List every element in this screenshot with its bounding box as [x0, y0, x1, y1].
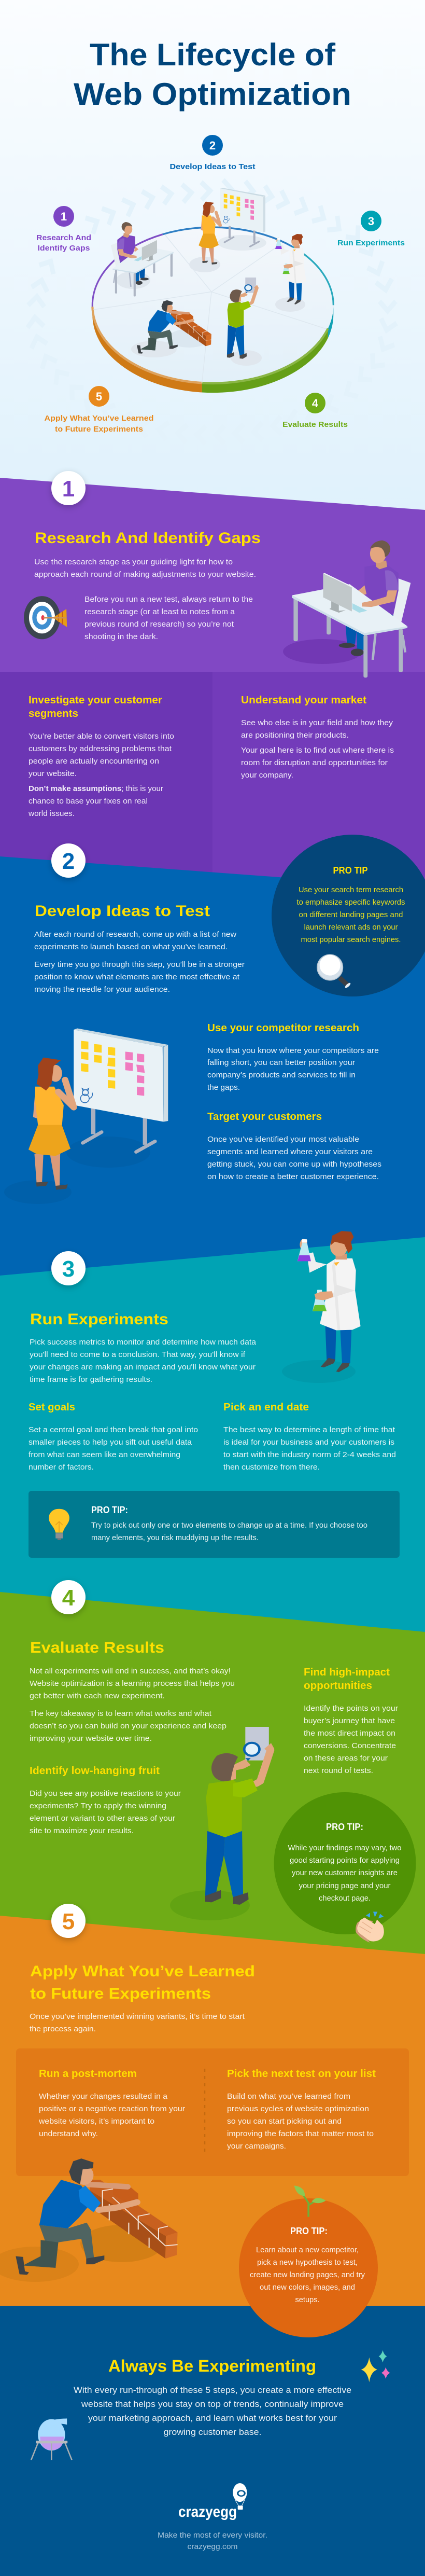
panel: set goals: smaller pieces to help you sift out useful data [29, 1438, 192, 1447]
text: closing paragraph: your marketing approach, and learn what works best for your [88, 2413, 337, 2423]
step marker 3: 3 [368, 215, 374, 228]
panel: investigate your customer segments: world issues. [28, 809, 75, 818]
panel: find high-impact opportunities: next round of tests. [304, 1766, 373, 1775]
text: evaluate intro: The key takeaway is to learn what works and what [30, 1709, 212, 1718]
text: run intro [30, 1338, 257, 1384]
panel: investigate your customer segments: Don’t make assumptions; this is your [29, 784, 163, 793]
panel: identify low-hanging fruit: Did you see any positive reactions to your [30, 1789, 181, 1798]
callout: pro tip circle orange: out new colors, images, and [260, 2283, 355, 2292]
text: apply intro [30, 2012, 245, 2033]
panel: investigate your customer segments: customers by addressing problems that [29, 744, 172, 753]
panel: understand your market: your company. [241, 771, 293, 780]
figure: analyst with magnifier [170, 1727, 274, 1920]
figure: scientist on disc [275, 234, 306, 312]
column: pick the next test: improving the factors that matter most to [227, 2129, 374, 2138]
text: apply intro: the process again. [30, 2025, 96, 2033]
badge: step 2 [51, 843, 86, 878]
panel: pick an end date: Pick an end date [223, 1402, 309, 1413]
figure: woman at sticky board on disc [189, 188, 266, 272]
panel: understand your market: Your goal here is to find out where there is [241, 746, 394, 755]
text: research note: previous round of research) so you’re not [84, 620, 234, 629]
panel: target your customers: Once you’ve identified your most valuable [207, 1135, 359, 1144]
step marker 2 [170, 135, 255, 171]
panel: find high-impact opportunities: opportunities [304, 1680, 372, 1692]
panel: understand your market: See who else is in your field and how they [241, 718, 393, 727]
step marker 5 [45, 386, 153, 434]
panel: find high-impact opportunities: on these areas for your [304, 1754, 388, 1763]
panel: find high-impact opportunities: Identify the points on your [304, 1704, 398, 1713]
heading: develop: Develop Ideas to Test [35, 903, 210, 920]
column: run a post-mortem: Whether your changes resulted in a [39, 2092, 168, 2101]
text: research note: research stage (or at least to notes from a [84, 607, 235, 616]
step marker 2: 2 [209, 139, 216, 152]
column: run a post-mortem: website visitors, it’s important to [38, 2117, 154, 2126]
panel: use your competitor research: company’s products and services to fill in [207, 1071, 356, 1079]
panel: use your competitor research: Now that you know where your competitors are [207, 1046, 379, 1055]
figure: researcher at desk on disc [111, 222, 174, 297]
panel: use your competitor research: falling short, you can better position your [207, 1058, 355, 1067]
icon: flask on stand [31, 2418, 72, 2460]
panel: evaluate section background [0, 1592, 425, 1961]
text: run intro: Pick success metrics to monitor and determine how much data [30, 1338, 257, 1347]
text: tagline [158, 2531, 267, 2551]
callout: pro tip circle green [274, 1792, 416, 1934]
column: pick the next test: Build on what you’ve learned from [227, 2092, 350, 2101]
step marker 3: Run Experiments [337, 239, 405, 247]
text: develop intro: moving the needle for your audience. [34, 985, 170, 994]
badge: step 5 [51, 1904, 86, 1938]
text: evaluate intro: Not all experiments will end in success, and that’s okay! [30, 1667, 231, 1675]
step marker 4: 4 [312, 397, 319, 410]
text: evaluate intro: Website optimization is a learning process that helps you [30, 1679, 235, 1688]
panel: investigate your customer segments: chance to base your fixes on real [29, 797, 148, 806]
callout: pro tip circle orange: PRO TIP: [290, 2226, 328, 2236]
text: evaluate intro [30, 1667, 235, 1743]
badge: step 1 [51, 471, 86, 505]
step marker 4 [282, 393, 348, 429]
panel: investigate your customer segments: Investigate your customer [29, 695, 162, 706]
panel: target your customers: on how to create a better customer experience. [207, 1172, 379, 1181]
panel: target your customers: getting stuck, you can come up with hypotheses [207, 1160, 381, 1169]
title [74, 37, 351, 112]
figure: analyst with magnifier on disc [227, 278, 262, 366]
panel: investigate your customer segments [28, 695, 174, 818]
badge: step 3: 3 [62, 1256, 75, 1282]
panel: use your competitor research [207, 1022, 379, 1092]
column: pick the next test [227, 2068, 376, 2151]
panel: target your customers [207, 1111, 381, 1181]
heading: apply: Apply What You’ve Learned [30, 1963, 255, 1980]
panel: use your competitor research: the gaps. [207, 1083, 240, 1092]
callout: pro tip circle green: While your findings may vary, two [288, 1844, 401, 1852]
column: run a post-mortem [38, 2068, 185, 2138]
callout: pro tip search terms: most popular search engines. [301, 935, 401, 944]
callout: pro tip circle orange: pick a new hypothesis to test, [257, 2258, 358, 2267]
step marker 2: Develop Ideas to Test [170, 162, 255, 171]
text: develop intro: After each round of research, come up with a list of new [34, 930, 236, 939]
panel: target your customers: segments and learned where your visitors are [207, 1147, 373, 1156]
figure: bricklayer on disc [131, 300, 211, 357]
panel: find high-impact opportunities: buyer’s journey that have [304, 1716, 395, 1725]
panel: identify low-hanging fruit: Identify low-hanging fruit [30, 1765, 160, 1777]
step marker 1 [36, 206, 91, 253]
lifecycle disc [92, 227, 333, 393]
callout: pro tip circle green: your pricing page and your [299, 1881, 391, 1890]
step marker 5: Apply What You’ve Learned [45, 414, 153, 423]
icon: light bulb [49, 1509, 69, 1540]
callout: pro tip circle orange: setups. [295, 2295, 319, 2304]
column: pick the next test: so you can start picking out and [227, 2117, 342, 2126]
step marker 5: to Future Experiments [55, 425, 143, 434]
text: evaluate intro: doesn’t so you can build on your experience and keep [30, 1722, 226, 1730]
panel: investigate your customer segments: You’re better able to convert visitors into [29, 732, 174, 741]
callout: pro tip circle orange [239, 2185, 378, 2337]
callout: pro tip circle green: checkout page. [319, 1894, 371, 1903]
panel: closing section background [0, 2306, 425, 2576]
panel: understand your market [241, 695, 394, 780]
text: develop intro [34, 930, 245, 994]
text: research intro: Use the research stage as your guiding light for how to [34, 558, 233, 566]
chevron ring [27, 180, 396, 444]
text: apply intro: Once you’ve implemented winning variants, it’s time to start [30, 2012, 245, 2021]
step marker 3 [337, 211, 405, 247]
callout: pro tip circle green: your new customer insights are [292, 1868, 398, 1877]
text: closing paragraph: growing customer base. [164, 2427, 261, 2437]
callout: pro tip circle green: PRO TIP: [326, 1822, 363, 1832]
step marker 1: Identify Gaps [37, 244, 90, 253]
panel: set goals: from what can seem like an overwhelming [29, 1450, 180, 1459]
callout: pro tip search terms [272, 835, 425, 996]
heading: evaluate: Evaluate Results [30, 1639, 164, 1656]
title: Web Optimization [74, 77, 351, 112]
badge: step 5: 5 [62, 1909, 75, 1934]
panel: find high-impact opportunities [304, 1667, 398, 1775]
panel: investigate your customer segments: people are actually encountering on [29, 757, 159, 766]
text: run intro: time frame is for gathering results. [30, 1375, 152, 1384]
panel: identify low-hanging fruit: element or variant to other areas of your [30, 1814, 175, 1823]
text: tagline: crazyegg.com [188, 2542, 237, 2551]
panel: set goals: Set goals [29, 1402, 75, 1413]
panel: identify low-hanging fruit: experiments? Try to apply the winning [30, 1802, 166, 1810]
callout: pro tip search terms: Use your search term research [299, 885, 403, 894]
figure: researcher at desk [283, 541, 410, 677]
callout: pro tip circle orange: Learn about a new competitor, [256, 2246, 359, 2254]
heading: run experiments: Run Experiments [30, 1311, 168, 1328]
panel: target your customers: Target your customers [207, 1111, 322, 1123]
icon: balloon [233, 2483, 247, 2510]
text: research note: Before you run a new test, always return to the [84, 595, 253, 604]
column: pick the next test: previous cycles of website optimization [227, 2104, 369, 2113]
text: run intro: you'll need to come to a conclusion. That way, you'll know if [30, 1350, 246, 1359]
panel: understand your market: Understand your market [241, 695, 366, 706]
panel: pick an end date: to start with the industry norm of 2-4 weeks and [223, 1450, 396, 1459]
panel: set goals [29, 1402, 198, 1472]
panel: apply section background [0, 1916, 425, 2308]
column: pick the next test: your campaigns. [227, 2142, 286, 2151]
step marker 5: 5 [96, 390, 102, 403]
panel: intro background [0, 0, 425, 519]
step marker 1: Research And [36, 233, 91, 242]
title: The Lifecycle of [90, 37, 336, 72]
panel: set goals: Set a central goal and then break that goal into [29, 1425, 198, 1434]
text: run intro: your changes are making an impact and you'll know what your [30, 1363, 256, 1372]
text: develop intro: experiments to launch based on what you’ve learned. [34, 943, 228, 951]
callout: pro tip circle orange: create new landing pages, and try [250, 2270, 365, 2279]
callout: pro tip box: many elements, you risk muddying up the results. [91, 1533, 259, 1542]
text: tagline: Make the most of every visitor. [158, 2531, 267, 2540]
badge: step 3 [51, 1251, 86, 1285]
text: closing paragraph: website that helps you stay on top of trends, continually improve [81, 2399, 344, 2409]
icon: seedling [294, 2185, 326, 2217]
panel: find high-impact opportunities: Find high-impact [304, 1667, 390, 1678]
text: research note: shooting in the dark. [84, 632, 158, 641]
badge: step 1: 1 [62, 476, 75, 502]
column: run a post-mortem: Run a post-mortem [39, 2068, 137, 2080]
callout: pro tip search terms: launch relevant ads on your [304, 923, 398, 932]
badge: step 4 [51, 1580, 86, 1614]
text: closing paragraph: With every run-through of these 5 steps, you create a more effective [74, 2385, 351, 2395]
callout: pro tip box: PRO TIP: [91, 1505, 128, 1515]
panel: post-mortem and next test [16, 2048, 409, 2176]
callout: pro tip search terms: on different landing pages and [299, 910, 403, 919]
panel: pick an end date: then customize from there. [223, 1463, 320, 1472]
column: run a post-mortem: understand why. [39, 2129, 98, 2138]
icon: target with arrow [24, 596, 67, 639]
figure: bricklayer [0, 2158, 178, 2282]
badge: step 4: 4 [62, 1585, 75, 1611]
heading: apply [30, 1963, 255, 2002]
column: pick the next test: Pick the next test on your list [227, 2068, 376, 2080]
text: research intro: approach each round of making adjustments to your website. [34, 570, 256, 579]
panel: understand your market: are positioning their products. [241, 731, 349, 740]
callout: pro tip search terms: to emphasize specific keywords [296, 898, 405, 907]
panel: pick an end date: The best way to determine a length of time that [223, 1425, 395, 1434]
text: evaluate intro: improving your website over time. [30, 1734, 152, 1743]
panel: investigate your customer segments: your website. [29, 769, 77, 778]
panel: understand your market: room for disruption and opportunities for [241, 758, 388, 767]
figure: woman at sticky board [4, 1028, 168, 1204]
panel: identify low-hanging fruit [30, 1765, 181, 1835]
step marker 4: Evaluate Results [282, 420, 348, 429]
panel: run section background [0, 1237, 425, 1639]
text: closing paragraph [74, 2385, 351, 2437]
panel: pick an end date: is ideal for your business and your customers is [223, 1438, 394, 1447]
panel: find high-impact opportunities: the most direct impact on [304, 1729, 395, 1738]
figure: scientist with flasks [282, 1231, 361, 1383]
heading: apply: to Future Experiments [30, 1985, 211, 2002]
text: research intro [34, 558, 256, 579]
panel: find high-impact opportunities: conversions. Concentrate [304, 1741, 396, 1750]
panel: set goals: number of factors. [29, 1463, 94, 1472]
callout: pro tip box: Try to pick out only one or two elements to change up at a time. If you choose too [91, 1521, 367, 1530]
callout: pro tip search terms: PRO TIP [333, 865, 368, 876]
logo: crazyegg balloon: crazyegg [178, 2503, 237, 2520]
icon: sparkles [361, 2350, 390, 2382]
text: develop intro: Every time you go through this step, you’ll be in a stronger [34, 960, 245, 969]
logo: crazyegg balloon [178, 2483, 247, 2520]
panel: pick an end date [223, 1402, 396, 1472]
text: develop intro: position to know what elements are the most effective at [34, 973, 240, 981]
icon: magnifying glass [317, 954, 351, 989]
callout: pro tip circle green: good starting points for applying [290, 1856, 400, 1865]
badge: step 2: 2 [62, 849, 75, 874]
panel: investigate your customer segments: segments [29, 708, 78, 719]
text: research note [84, 595, 253, 641]
panel: develop section background [0, 856, 425, 1281]
icon: clapping hands [356, 1912, 384, 1943]
step marker 1: 1 [61, 210, 67, 223]
panel: identify low-hanging fruit: site to maximize your results. [30, 1826, 134, 1835]
panel: use your competitor research: Use your competitor research [207, 1022, 359, 1034]
heading: research: Research And Identify Gaps [35, 530, 261, 547]
heading: always be experimenting: Always Be Experimenting [108, 2357, 316, 2375]
callout: pro tip box [29, 1491, 400, 1558]
text: evaluate intro: get better with each new experiment. [30, 1692, 165, 1700]
panel: research section background [0, 478, 425, 895]
column: run a post-mortem: positive or a negative reaction from your [39, 2104, 185, 2113]
